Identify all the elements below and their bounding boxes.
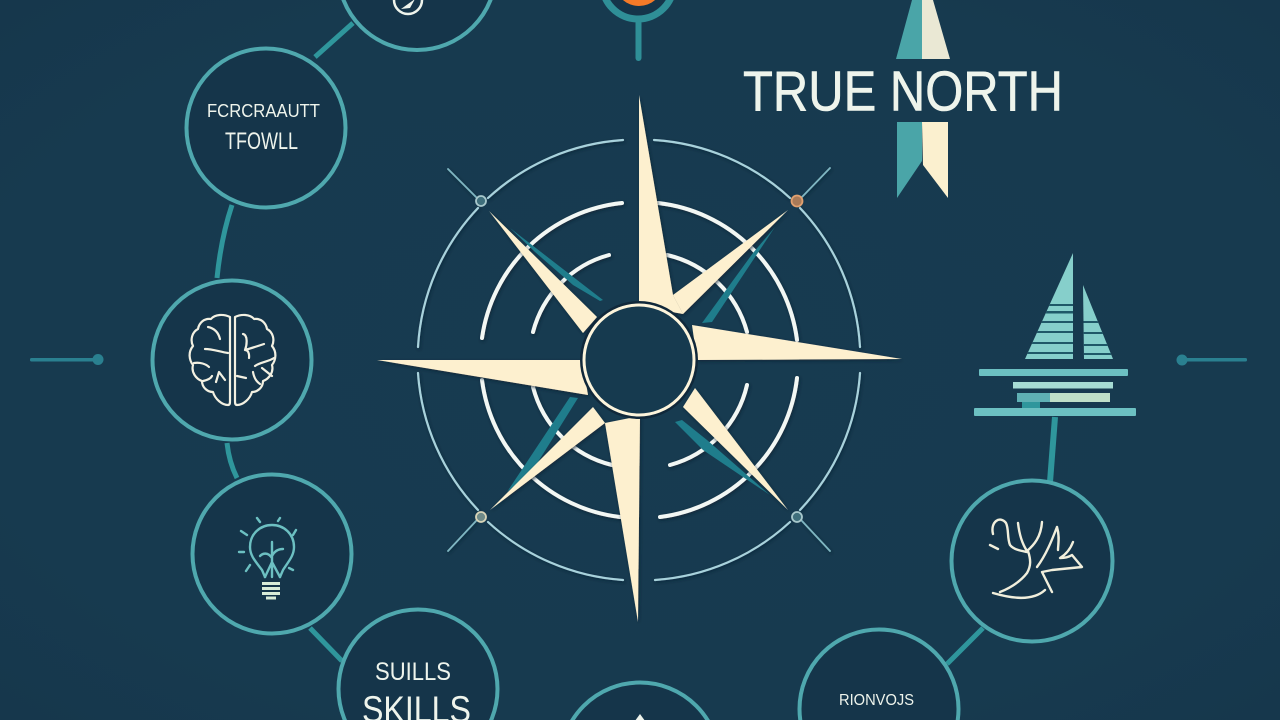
compass corner nodes [476,196,802,522]
title arrow tail [897,122,948,198]
boat hull [974,369,1136,416]
circle: top left compass icon [338,0,496,50]
left side dash [30,354,104,365]
circle: top centre orange node [602,0,674,61]
compass centre ring [580,301,698,419]
compass star points [377,95,902,622]
circle: bottom centre [560,682,720,720]
connectors between circles [217,23,1055,664]
circle: personality text: FCRCRAAUTT [207,101,320,121]
right side dash [1176,354,1247,366]
circle: personality text: TFOWLL [225,128,298,155]
circle: bottom right text [800,630,958,720]
title arrow top [896,0,950,59]
circle: lightbulb icon [192,474,352,634]
circle: skills text: SUILLS [375,658,451,686]
compass rose [377,95,902,622]
circle: skills text [338,610,498,720]
boat sails [1025,253,1113,359]
compass teal slivers [507,227,775,495]
boat icon [974,250,1136,416]
compass arcs [418,140,860,580]
circle: brain icon [152,280,312,440]
circle: bottom right text: RIONVOJS [839,692,914,709]
circle: personality text [186,48,346,208]
circle: tree icon [952,480,1112,642]
title: TRUE NORTH [743,60,1063,124]
